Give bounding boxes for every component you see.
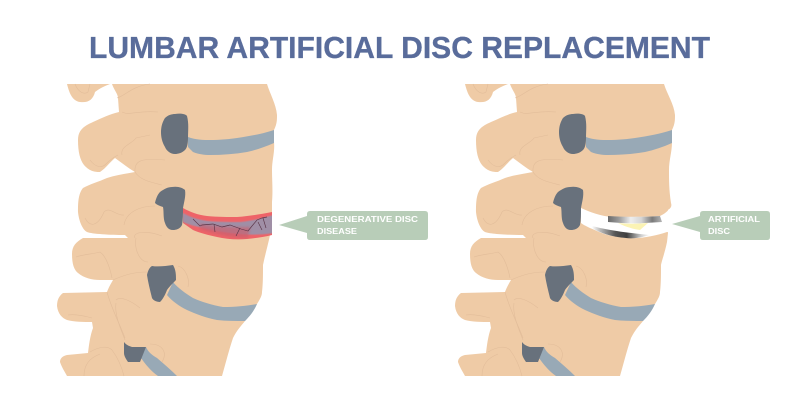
cracks xyxy=(193,217,267,236)
callout: degenerative disc disease: DISEASE xyxy=(317,226,357,236)
facet shadows xyxy=(124,114,188,362)
callout: artificial disc: ARTIFICIAL xyxy=(708,214,760,224)
degenerated disc with red glow xyxy=(183,208,272,240)
callout: artificial disc xyxy=(672,211,770,240)
title: LUMBAR ARTIFICIAL DISC REPLACEMENT xyxy=(89,31,710,65)
callout: degenerative disc disease: DEGENERATIVE DISC xyxy=(317,214,418,224)
top disc xyxy=(188,130,274,155)
anatomical contour lines xyxy=(68,84,189,376)
panel: degenerative spine xyxy=(57,84,277,376)
fourth disc xyxy=(539,347,575,376)
third disc xyxy=(565,282,655,321)
callout: degenerative disc disease xyxy=(279,211,428,240)
third disc xyxy=(167,282,257,321)
top disc xyxy=(586,130,672,155)
vertebrae silhouette xyxy=(455,84,675,376)
facet shadows xyxy=(522,114,586,362)
artificial disc implant xyxy=(581,208,680,238)
callout: artificial disc: DISC xyxy=(708,226,730,236)
panel: artificial disc spine xyxy=(455,84,680,376)
anatomical contour lines xyxy=(466,84,587,376)
fourth disc xyxy=(141,347,177,376)
vertebrae silhouette xyxy=(57,84,277,376)
